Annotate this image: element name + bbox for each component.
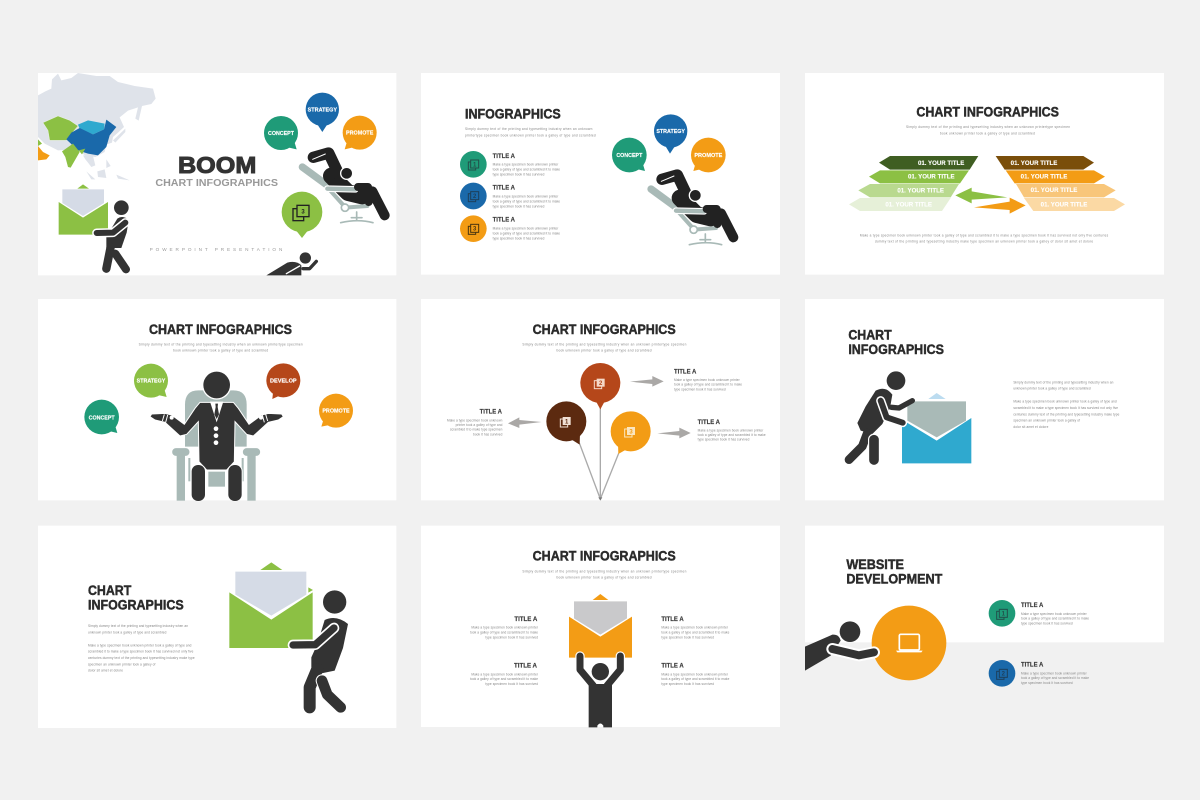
body text: specimen an unknown printer took a galley of <box>1013 419 1080 423</box>
item 2 <box>989 660 1089 687</box>
text: bottom right: took a galley of type and scrambled it to make <box>698 433 766 437</box>
balloon 3 <box>611 411 651 454</box>
chair <box>172 390 261 501</box>
item 2: took a galley of type and scrambled it to make <box>1021 676 1089 680</box>
envelope: blue <box>902 393 971 463</box>
body text: Make a type specimen book unknown printer took a galley of type and <box>88 643 192 647</box>
text: upper left: TITLE A <box>514 616 538 623</box>
bubble: promote <box>691 138 726 172</box>
text: lower left: TITLE A <box>514 663 537 670</box>
heading: INFOGRAPHICS <box>848 342 944 357</box>
text: upper right: TITLE A <box>661 616 684 623</box>
footer text <box>860 234 1109 244</box>
text: lower right: Make a type specimen book unknown printer <box>661 672 728 676</box>
balloon 1 <box>546 401 586 445</box>
tagline: POWERPOINT PRESENTATION <box>150 247 282 252</box>
text: left: scrambled it to make type specimen <box>450 428 503 432</box>
bubble: concept <box>264 116 298 150</box>
text: lower right: took a galley of type and scrambled it to make <box>661 677 730 681</box>
figure: man carrying envelope <box>97 200 129 269</box>
panel: man lifting envelope <box>421 526 780 727</box>
item 2: took a galley of type and scrambled it to make <box>493 199 560 203</box>
text: top right: TITLE A <box>674 369 696 376</box>
item 2: type specimen book It has survived <box>1021 681 1073 685</box>
left green tiers: 01. YOUR TITLE <box>908 174 955 180</box>
right orange tiers: 01. YOUR TITLE <box>1011 161 1057 167</box>
left green tiers: 01. YOUR TITLE <box>918 161 964 167</box>
item 1: 1 <box>1002 612 1006 618</box>
right orange tiers: 01. YOUR TITLE <box>1041 202 1087 208</box>
item 2: Make a type specimen book unknown printer <box>493 194 558 198</box>
balloon stems <box>579 408 619 501</box>
text: lower right: type specimen book It has survived <box>661 682 714 686</box>
item 1: type specimen book It has survived <box>1021 621 1073 625</box>
item 1: Make a type specimen book unknown printer <box>1021 612 1087 616</box>
item 3: Make a type specimen book unknown printer <box>493 226 558 230</box>
bubble: develop: DEVELOP <box>270 378 297 384</box>
body text: unknown printer took a galley of type and scrambled <box>1013 387 1091 391</box>
heading <box>846 557 943 586</box>
bubble: concept: CONCEPT <box>616 153 643 159</box>
heading: CHART <box>88 583 132 598</box>
bubble: develop <box>266 363 300 399</box>
arrow: right top <box>630 376 664 387</box>
heading: CHART INFOGRAPHICS <box>533 322 676 337</box>
item 1: took a galley of type and scrambled it to make <box>493 168 560 172</box>
arrow: green left <box>955 188 1007 203</box>
intro text: book unknown printer took a galley of type and scrambled <box>940 131 1035 135</box>
item 3: 3 <box>473 227 477 233</box>
body text: scrambled it to make a type specimen book It has survived not only five <box>88 650 194 654</box>
body text <box>1013 380 1120 429</box>
body text: dolor sit amet et dolore <box>1013 425 1049 429</box>
text: left <box>447 409 503 436</box>
bubble: concept <box>84 400 119 434</box>
body text: dolor sit amet et dolore <box>88 668 123 672</box>
envelope: green <box>229 562 313 648</box>
bubble: green numbered <box>282 192 322 238</box>
text: bottom right: type specimen book it has survived <box>698 438 750 442</box>
text: upper left <box>470 616 538 639</box>
text: left: book It has survived <box>473 432 503 436</box>
bubble: strategy: STRATEGY <box>137 379 166 385</box>
bubble: strategy: STRATEGY <box>308 107 337 113</box>
text: left: TITLE A <box>480 409 502 416</box>
text: upper right <box>661 616 730 639</box>
title: BOOM: BOOM <box>178 152 256 178</box>
heading: WEBSITE <box>846 557 904 572</box>
item 2 <box>460 183 560 209</box>
figure: man pushing envelope <box>849 371 912 460</box>
arrow: orange right <box>974 198 1026 214</box>
text: lower right <box>661 663 730 686</box>
right orange tiers: 01. YOUR TITLE <box>1031 188 1077 194</box>
intro text <box>465 127 596 137</box>
bubble: promote <box>343 116 377 150</box>
heading: INFOGRAPHICS <box>465 107 561 122</box>
intro text: book unknown printer took a galley of type and scrambled <box>556 349 652 353</box>
heading <box>88 583 184 612</box>
item 2: type specimen book it has survived <box>493 204 545 208</box>
footer text: Make a type specimen book unknown printer took a galley of type and scrambled it to make a type specimen book It has survived not only five centuries <box>860 234 1109 238</box>
intro text: book unknown printer took a galley of type and scrambled <box>556 575 652 579</box>
text: lower left <box>470 663 538 686</box>
text: lower left: took a galley of type and scrambled it to make <box>470 677 538 681</box>
balloon 2 <box>580 363 620 409</box>
body text: specimen an unknown printer took a galley of <box>88 662 155 666</box>
intro text: Simply dummy text of the printing and typesetting industry when an unknown printertype specimen <box>522 343 687 347</box>
text: top right: took a galley of type and scrambled it to make <box>674 383 742 387</box>
envelope: orange <box>569 594 632 658</box>
bubble: concept: CONCEPT <box>89 415 115 421</box>
item 1 <box>460 151 560 178</box>
bubble: promote: PROMOTE <box>322 409 350 415</box>
intro text: Simply dummy text of the printing and typesetting industry when an unknown printertype specimen <box>906 125 1070 129</box>
text: upper right: type specimen book It has survived <box>661 635 714 639</box>
text: bottom right: Make a type specimen book unknown printer <box>698 428 763 432</box>
bubble: strategy <box>306 93 339 132</box>
intro text: Simply dummy text of the printing and typesetting industry when an unknown printertype specimen <box>522 569 687 573</box>
text: top right: Make a type specimen book unknown printer <box>674 378 740 382</box>
left green tiers: 01. YOUR TITLE <box>897 188 944 194</box>
body text: Simply dummy text of the printing and typesetting industry when an <box>1013 380 1114 384</box>
panel: arrow chart <box>805 73 1164 275</box>
item 1: 1 <box>473 162 477 168</box>
arrow: left <box>508 417 542 428</box>
panel: seated man <box>38 299 396 501</box>
intro text: Simply dummy text of the printing and typesetting industry when an unknown printertype specimen <box>139 343 303 347</box>
bubble: concept: CONCEPT <box>268 131 295 137</box>
text: bottom right: TITLE A <box>698 419 720 426</box>
panel: man with blue envelope <box>805 299 1164 500</box>
balloon 1: 1 <box>565 419 569 425</box>
item 3: TITLE A <box>493 217 515 224</box>
bubble: strategy <box>134 364 168 398</box>
bubble: strategy <box>654 114 687 154</box>
bubble: promote <box>319 394 353 428</box>
item 2: 2 <box>473 194 477 200</box>
heading: DEVELOPMENT <box>846 571 943 586</box>
text: bottom right <box>698 419 766 442</box>
figure: crawling man <box>266 252 316 275</box>
left green tiers: 01. YOUR TITLE <box>885 203 932 209</box>
intro text: printertype specimen book unknown printer took a galley of type and scrambled <box>465 133 596 137</box>
balloon 3: 3 <box>629 429 633 435</box>
item 1: TITLE A <box>493 153 515 160</box>
left green tiers <box>849 156 978 211</box>
balloon 2: 2 <box>599 381 603 387</box>
orange circle with laptop icon <box>872 606 946 680</box>
body text: centuries dummy text of the printing and typesetting industry make type <box>1013 412 1120 416</box>
bubble: strategy: STRATEGY <box>656 129 685 135</box>
subtitle: CHART INFOGRAPHICS <box>155 178 278 189</box>
intro text <box>906 125 1070 135</box>
bubble: concept <box>612 138 647 172</box>
text: lower left: Make a type specimen book unknown printer <box>471 672 538 676</box>
item 2: Make a type specimen book unknown printer <box>1021 671 1087 675</box>
figure: man lifting <box>580 656 620 727</box>
figure: man reclining in chair <box>651 175 733 245</box>
text: lower right: TITLE A <box>661 663 684 670</box>
text: upper right: took a galley of type and scrambled it to make <box>661 630 730 634</box>
figure: man reclining in chair <box>302 153 385 223</box>
map of Asia <box>38 73 156 180</box>
item 1: Make a type specimen book unknown printer <box>493 163 558 167</box>
panel: balloons <box>421 299 780 501</box>
intro text <box>522 343 687 353</box>
item 3 <box>460 215 560 242</box>
text: lower left: type specimen book It has survived <box>485 682 538 686</box>
body text: Make a type specimen book unknown printer took a galley of type and <box>1013 400 1117 404</box>
text: left: Make a type specimen book unknown <box>447 418 503 422</box>
item 3: type specimen book it has survived <box>493 236 545 240</box>
text: top right: type specimen book it has survived <box>674 387 726 391</box>
arrow: right bottom <box>657 428 691 438</box>
item 2: TITLE A <box>1021 662 1043 669</box>
bubble: promote: PROMOTE <box>694 153 723 159</box>
heading: CHART INFOGRAPHICS <box>533 549 676 564</box>
panel: boom cover <box>38 73 396 275</box>
heading: CHART INFOGRAPHICS <box>916 104 1059 119</box>
intro text: book unknown printer took a galley of type and scrambled <box>173 349 268 353</box>
item 1 <box>989 600 1089 627</box>
panel: infographics list <box>421 73 780 275</box>
body text: unknown printer took a galley of type and scrambled <box>88 630 167 634</box>
heading: CHART <box>848 328 892 343</box>
figure: man pushing <box>805 621 874 671</box>
body text: Simply dummy text of the printing and typesetting industry when an <box>88 624 188 628</box>
body text <box>88 624 195 672</box>
text: upper left: took a galley of type and scrambled it to make <box>470 630 538 634</box>
panel: man with green envelope <box>38 526 396 728</box>
envelope: green <box>59 184 108 235</box>
body text: scrambled it to make a type specimen book It has survived not only five <box>1013 406 1118 410</box>
text: upper left: Make a type specimen book unknown printer <box>471 626 538 630</box>
figure: shrugging seated man <box>150 370 283 501</box>
panel: website development <box>805 526 1164 687</box>
bubble: promote: PROMOTE <box>346 131 374 137</box>
item 1: TITLE A <box>1021 602 1043 609</box>
right orange tiers <box>996 156 1125 211</box>
body text: centuries dummy text of the printing and typesetting industry make type <box>88 656 195 660</box>
intro text <box>522 569 687 579</box>
text: upper right: Make a type specimen book unknown printer <box>661 626 728 630</box>
intro text <box>139 343 303 353</box>
item 1: took a galley of type and scrambled it to make <box>1021 617 1089 621</box>
item 3: took a galley of type and scrambled it to make <box>493 231 560 235</box>
item 2: 2 <box>1002 672 1006 678</box>
right orange tiers: 01. YOUR TITLE <box>1021 174 1067 180</box>
heading <box>848 328 944 357</box>
intro text: Simply dummy text of the printing and typesetting industry when an unknown <box>465 127 593 131</box>
text: left: printer took a galley of type and <box>456 423 503 427</box>
item 2: TITLE A <box>493 185 515 192</box>
text: top right <box>674 369 742 391</box>
heading: INFOGRAPHICS <box>88 597 184 612</box>
figure: man carrying envelope <box>293 590 348 707</box>
text: upper left: type specimen book It has survived <box>485 635 538 639</box>
heading: CHART INFOGRAPHICS <box>149 322 292 337</box>
item 1: type specimen book it has survived <box>493 173 545 177</box>
footer text: dummy text of the printing and typesetting industry make type specimen an unknown printer took a galley of dolor sit amet et dolore <box>875 240 1093 244</box>
bubble: green numbered: 3 <box>301 210 305 216</box>
